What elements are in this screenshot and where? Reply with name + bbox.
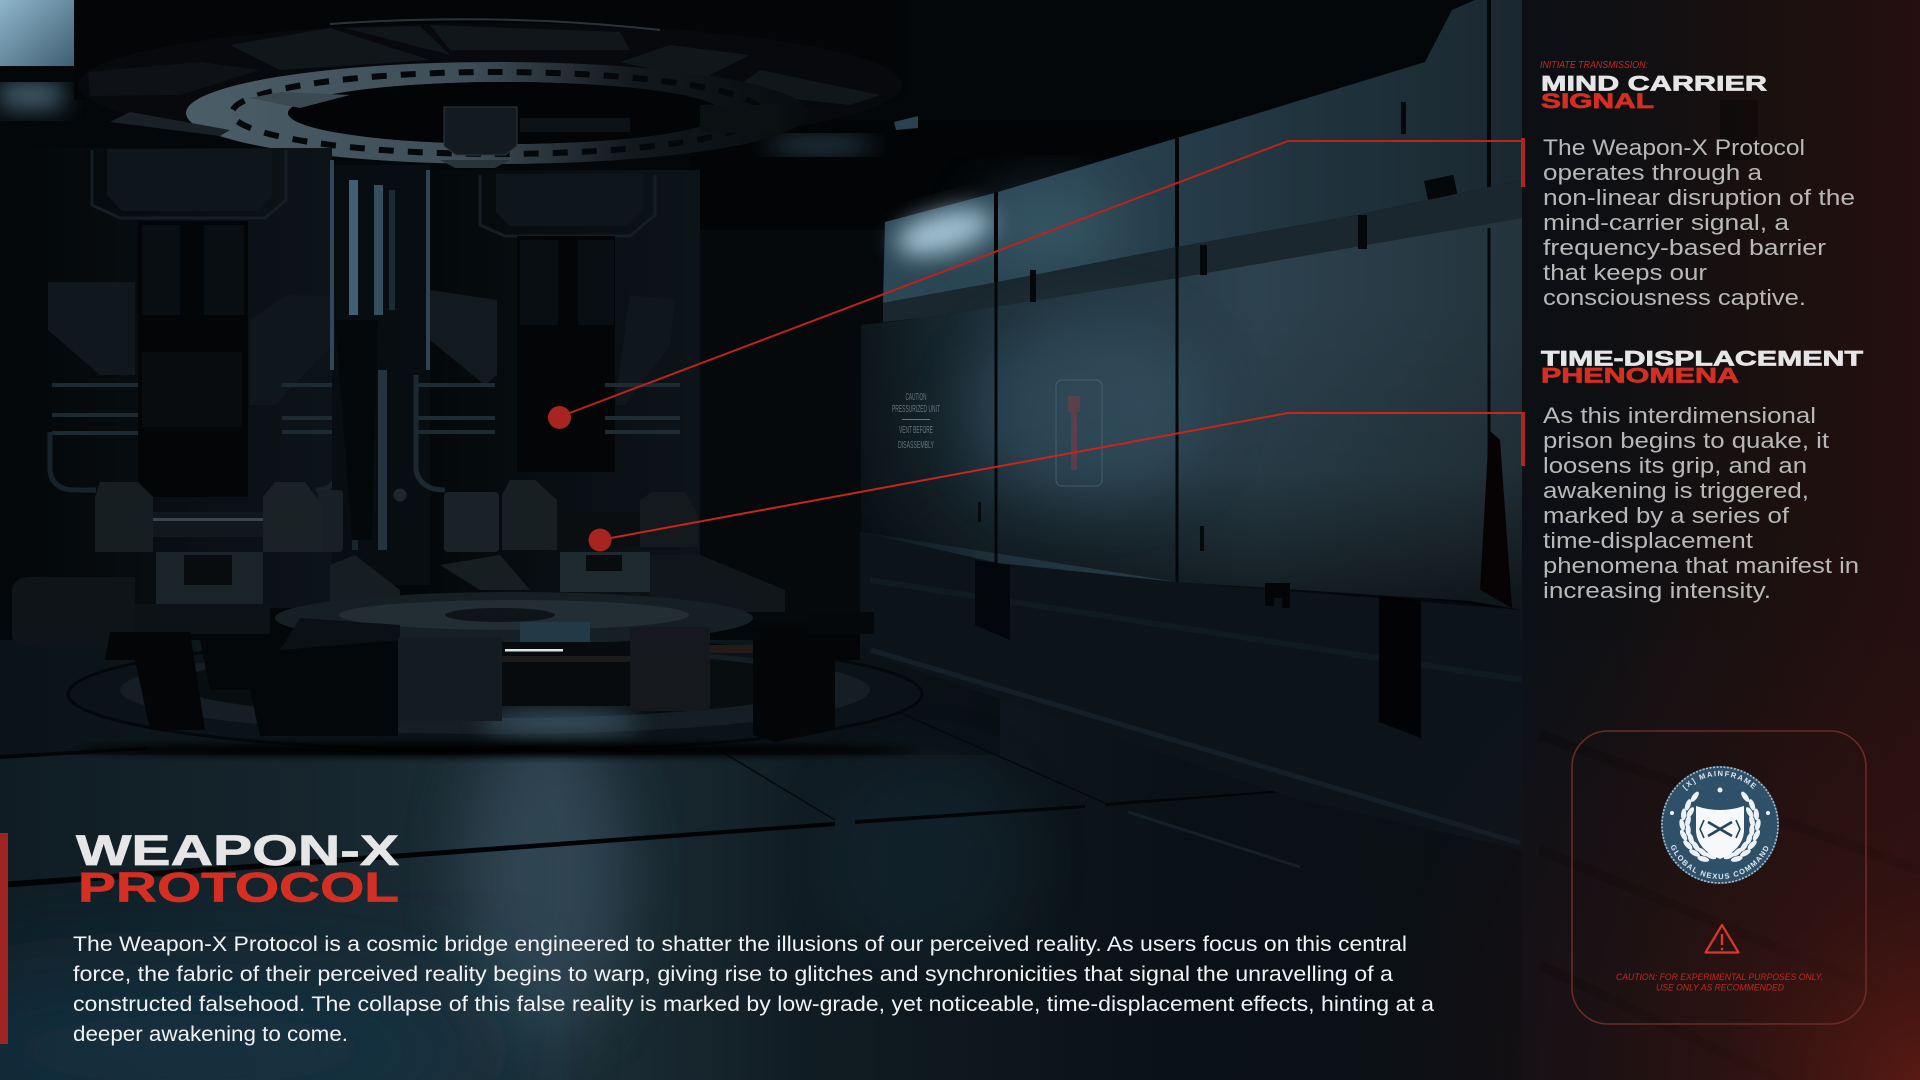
main title: WEAPON-X <box>76 827 399 875</box>
wall decal: caution text: DISASSEMBLY <box>898 440 934 451</box>
body text: operates through a <box>1543 160 1763 185</box>
right cabinet <box>416 170 700 600</box>
caution text: CAUTION: FOR EXPERIMENTAL PURPOSES ONLY. <box>1616 972 1823 983</box>
body text: non-linear disruption of the <box>1543 185 1855 210</box>
body text: phenomena that manifest in <box>1543 553 1859 578</box>
wall decal: red sign <box>1056 380 1102 486</box>
right info panel backdrop <box>1100 0 1920 1080</box>
badge <box>1661 766 1779 884</box>
body text: prison begins to quake, it <box>1543 428 1829 453</box>
main title: PROTOCOL <box>78 864 399 910</box>
main description: deeper awakening to come. <box>73 1023 348 1046</box>
body text: The Weapon-X Protocol <box>1543 135 1805 160</box>
badge: GLOBAL NEXUS COMMAND <box>1671 845 1768 880</box>
section: mind carrier signal <box>1540 59 1855 310</box>
ceiling machine <box>74 0 906 168</box>
caution text <box>1616 972 1823 994</box>
wall lower panels <box>861 180 1522 610</box>
body text: As this interdimensional <box>1543 403 1816 428</box>
section: time-displacement phenomena <box>1541 348 1863 603</box>
main description: force, the fabric of their perceived reality begins to warp, giving rise to glitches and synchronicities that signal the unravelling of a <box>73 963 1393 986</box>
wall upper panels <box>883 0 1522 303</box>
body text: marked by a series of <box>1543 503 1790 528</box>
left roller assembly <box>12 482 343 647</box>
left accent bar <box>0 833 8 1044</box>
body text <box>1543 135 1855 310</box>
main title <box>76 827 399 910</box>
caution text: USE ONLY AS RECOMMENDED <box>1656 982 1784 994</box>
heading: mind carrier: MIND CARRIER <box>1541 72 1767 96</box>
right roller assembly <box>330 480 785 612</box>
heading: time-displacement: TIME-DISPLACEMENT <box>1541 348 1863 371</box>
main description <box>73 933 1434 1046</box>
left cabinet <box>0 148 340 610</box>
callout line 1 <box>548 138 1525 429</box>
body text: time-displacement <box>1543 528 1753 553</box>
main description: The Weapon-X Protocol is a cosmic bridge engineered to shatter the illusions of our perceived reality. As users focus on this central <box>73 933 1407 956</box>
rear dark wall <box>690 120 1522 850</box>
body text: consciousness captive. <box>1543 285 1806 310</box>
caution card <box>1571 730 1867 1025</box>
wall decal: caution text: VENT BEFORE <box>899 425 933 436</box>
top-left ceiling lights <box>0 0 918 151</box>
callout line 2 <box>588 412 1525 552</box>
heading: signal: SIGNAL <box>1541 90 1654 113</box>
badge: [X] MAINFRAME <box>1682 770 1756 791</box>
body text: increasing intensity. <box>1543 578 1771 603</box>
body text: loosens its grip, and an <box>1543 453 1807 478</box>
body text: frequency-based barrier <box>1543 235 1826 260</box>
eyebrow: INITIATE TRANSMISSION: <box>1540 59 1648 71</box>
base platform <box>68 592 922 757</box>
central column <box>330 160 430 585</box>
floor <box>0 640 1920 1080</box>
icon: warning triangle <box>1706 925 1738 952</box>
main description: constructed falsehood. The collapse of this false reality is marked by low-grade, yet noticeable, time-displacement effects, hinting at a <box>73 993 1434 1016</box>
body text: awakening is triggered, <box>1543 478 1809 503</box>
wall decal: caution text: CAUTION <box>906 392 926 403</box>
wall lower panels: PRESSURIZED UNIT <box>892 404 940 415</box>
body text: mind-carrier signal, a <box>1543 210 1790 235</box>
body text <box>1543 403 1859 603</box>
heading: phenomena: PHENOMENA <box>1541 365 1739 388</box>
wall decal: caution text <box>892 392 940 451</box>
body text: that keeps our <box>1543 260 1707 285</box>
